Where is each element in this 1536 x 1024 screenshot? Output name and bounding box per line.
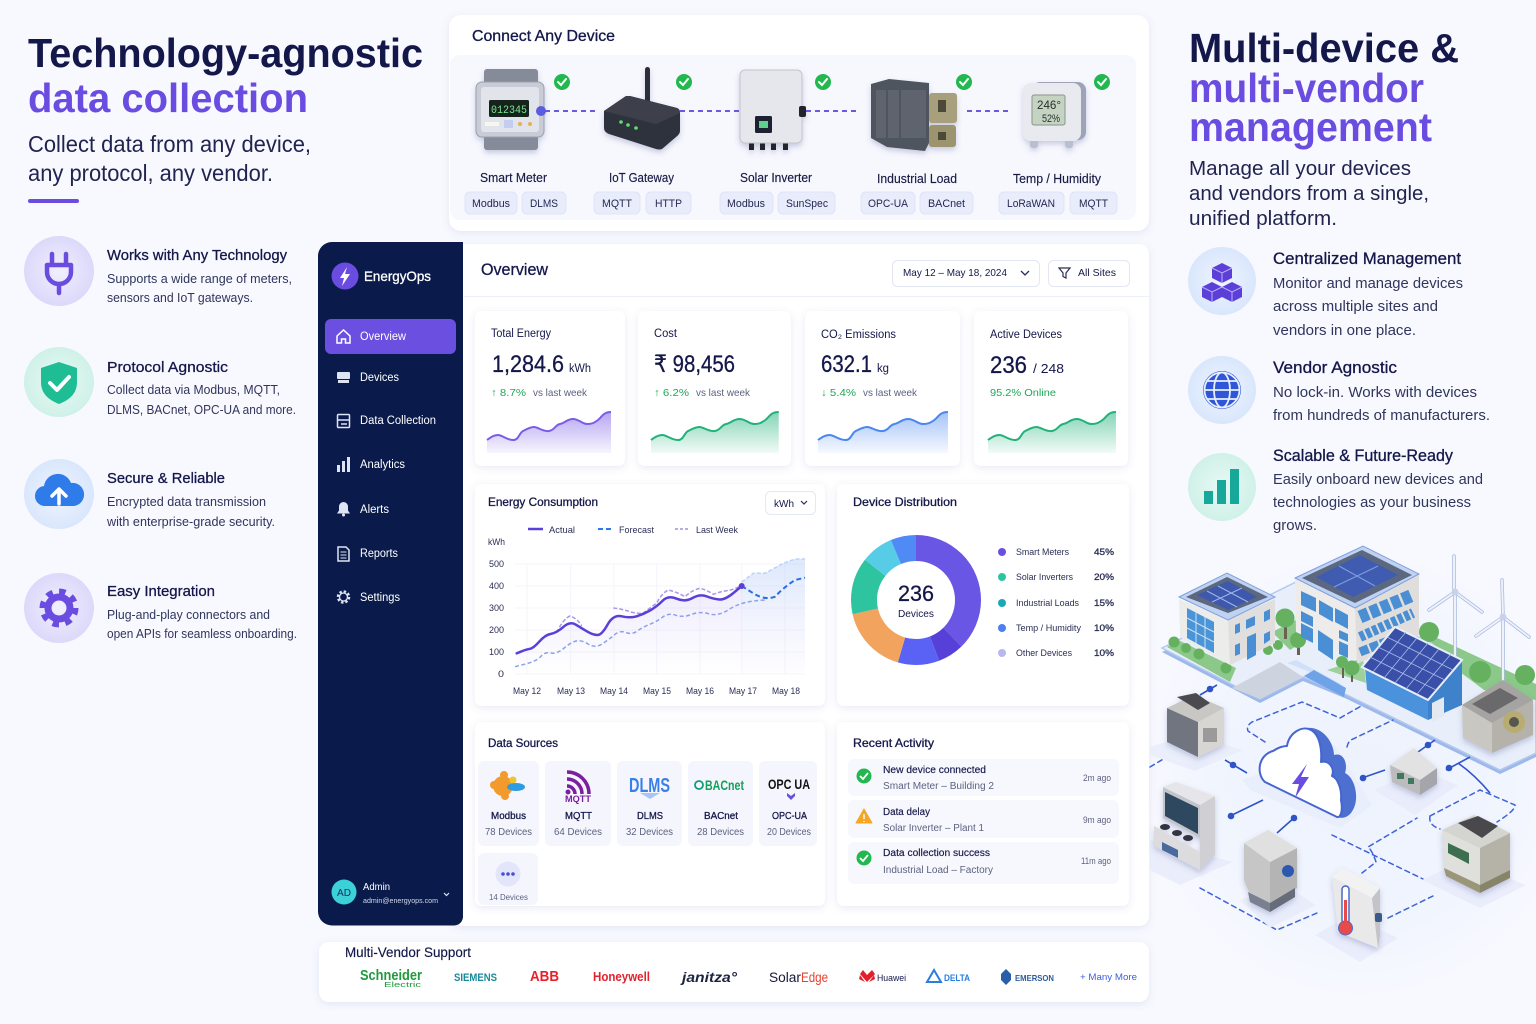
logo: schneider electric: Electric xyxy=(384,980,421,989)
device: temp and humidity sensor xyxy=(1023,82,1086,148)
donut legend: 15% xyxy=(1094,598,1114,608)
kpi: co2 emissions xyxy=(805,311,960,466)
panel: data sources: Data Sources xyxy=(488,736,558,750)
donut legend: Solar Inverters xyxy=(1016,572,1073,582)
overview header: May 12 – May 18, 2024 xyxy=(903,267,1007,279)
logo: delta xyxy=(927,970,970,984)
sparkline xyxy=(651,412,779,453)
panel: energy consumption chart: Energy Consumption xyxy=(488,495,598,509)
device: industrial load xyxy=(871,79,957,151)
tile: opc-ua: OPC UA xyxy=(768,776,810,792)
sidebar xyxy=(318,242,463,926)
legend: Actual xyxy=(549,525,575,536)
tile: dlms: 32 Devices xyxy=(626,827,673,838)
logo: solaredge: Solar xyxy=(769,970,802,985)
tile: other sources: 14 Devices xyxy=(489,892,528,902)
subtitle: Collect data from any device, xyxy=(28,131,311,157)
feature: protocol agnostic: DLMS, BACnet, OPC-UA and more. xyxy=(107,403,296,417)
nav: alerts xyxy=(337,502,389,516)
nav: devices xyxy=(337,372,399,384)
nav: overview (active): Overview xyxy=(360,331,407,343)
nav: analytics xyxy=(337,457,405,472)
nav: reports xyxy=(338,547,398,561)
donut legend: 45% xyxy=(1094,547,1114,557)
device: enclosure xyxy=(1244,830,1297,912)
protocol pills: OPC-UA xyxy=(868,198,909,210)
kpi: active devices: / 248 xyxy=(1033,361,1064,376)
feature: easy integration: open APIs for seamless onboarding. xyxy=(107,627,297,641)
axes: 300 xyxy=(489,603,504,614)
icon: cloud upload xyxy=(24,459,94,529)
kpi: active devices: 236 xyxy=(990,352,1027,379)
tile: mqtt: 64 Devices xyxy=(554,827,602,838)
feature: scalable and future-ready: Scalable & Future-Ready xyxy=(1273,447,1454,465)
protocol pills xyxy=(465,192,1117,214)
logo: delta: DELTA xyxy=(944,973,970,984)
donut center label xyxy=(898,581,934,620)
cloud hub xyxy=(1242,728,1372,828)
feature: vendor agnostic: from hundreds of manufacturers. xyxy=(1273,408,1490,424)
nav: devices: Devices xyxy=(360,372,399,384)
kpi: cost xyxy=(638,311,791,466)
unit selector xyxy=(766,492,816,514)
device: temperature sensor xyxy=(1332,868,1382,948)
tile: mqtt: MQTT xyxy=(565,794,591,805)
icon: gear xyxy=(24,573,94,643)
axes: 100 xyxy=(489,647,504,658)
tile: dlms xyxy=(617,761,682,846)
title: data collection xyxy=(28,75,308,121)
device: network cabinet xyxy=(1167,693,1224,757)
feature: scalable and future-ready: Easily onboard new devices and xyxy=(1273,472,1483,488)
donut legend xyxy=(998,547,1114,658)
logo: huawei: Huawei xyxy=(877,973,906,983)
feature: secure and reliable: with enterprise-grade security. xyxy=(106,515,275,529)
tile: opc-ua xyxy=(759,761,817,846)
feature: secure and reliable: Secure & Reliable xyxy=(107,470,225,487)
logo: siemens: SIEMENS xyxy=(454,972,497,984)
feature: works with any technology: sensors and IoT gateways. xyxy=(107,291,253,305)
feature: protocol agnostic: Protocol Agnostic xyxy=(107,359,229,376)
axes xyxy=(488,537,800,697)
panel: connect any device xyxy=(449,15,1149,231)
tile: bacnet xyxy=(688,761,753,846)
activity: data delay: Solar Inverter – Plant 1 xyxy=(883,823,984,834)
device labels: IoT Gateway xyxy=(609,171,675,185)
logo: schneider electric: Schneider xyxy=(360,968,422,984)
axes: 0 xyxy=(498,669,504,680)
feature: centralized management: Monitor and manage devices xyxy=(1273,276,1463,292)
logo: honeywell: Honeywell xyxy=(593,970,650,984)
device labels: Solar Inverter xyxy=(740,171,812,185)
unit selector: kWh xyxy=(774,498,794,510)
donut center label: Devices xyxy=(898,608,934,620)
device: compressor xyxy=(1462,680,1533,753)
activity: data delay xyxy=(848,800,1119,838)
kpi: co2 emissions: vs last week xyxy=(863,387,918,399)
feature: easy integration: Plug-and-play connectors and xyxy=(107,608,270,622)
logo xyxy=(332,262,431,290)
axes: 400 xyxy=(489,581,504,592)
wind turbines xyxy=(1429,556,1529,680)
logo: schneider electric xyxy=(360,968,422,989)
panel: multi-vendor support xyxy=(319,942,1149,1002)
user profile: Admin xyxy=(363,882,390,893)
connection lines xyxy=(545,110,1010,112)
subtitle: Manage all your devices xyxy=(1189,157,1411,180)
kpi: active devices: 95.2% Online xyxy=(990,387,1056,399)
tile: bacnet: BACnet xyxy=(705,777,744,793)
device: smart meter xyxy=(476,69,546,150)
kpi: cost: vs last week xyxy=(696,387,751,399)
donut legend: Industrial Loads xyxy=(1016,598,1079,608)
legend: Forecast xyxy=(619,525,654,536)
panel: device distribution: Device Distribution xyxy=(853,495,957,509)
sparkline xyxy=(818,412,948,453)
feature: secure and reliable xyxy=(24,459,275,529)
kpi: cost: ₹ 98,456 xyxy=(654,351,735,378)
status checks xyxy=(554,74,1110,90)
user profile: admin@energyops.com xyxy=(363,896,438,905)
panel: recent activity xyxy=(837,722,1129,906)
kpi: total energy xyxy=(475,311,625,466)
tile: dlms: DLMS xyxy=(637,810,663,822)
axes: May 14 xyxy=(600,686,628,697)
donut legend: Other Devices xyxy=(1016,648,1072,658)
axes: 200 xyxy=(489,625,504,636)
axes: kWh xyxy=(488,537,505,548)
user profile xyxy=(332,880,449,905)
tile: mqtt xyxy=(545,761,611,846)
feature: protocol agnostic xyxy=(24,347,296,417)
accent bar xyxy=(28,199,79,203)
device: iot gateway xyxy=(604,67,680,150)
kpi: active devices xyxy=(974,311,1128,466)
gridlines and plot xyxy=(515,559,805,674)
subtitle: unified platform. xyxy=(1189,207,1337,230)
logo: huawei xyxy=(859,970,906,983)
logo: janitza: janitza° xyxy=(680,969,737,985)
protocol pills: HTTP xyxy=(655,198,682,210)
tile: opc-ua: OPC-UA xyxy=(772,810,807,822)
isometric illustration: connected sites and devices xyxy=(1150,546,1536,962)
feature: scalable and future-ready: technologies as your business xyxy=(1273,495,1471,511)
feature: vendor agnostic xyxy=(1188,356,1490,424)
device labels xyxy=(480,171,1102,186)
kpi: total energy: kWh xyxy=(569,363,591,375)
axes: 500 xyxy=(489,559,504,570)
feature: scalable and future-ready: grows. xyxy=(1273,518,1317,534)
icon: cubes xyxy=(1188,247,1256,315)
device: smart meter: 012345 xyxy=(491,105,527,117)
device: temp and humidity sensor: 246° xyxy=(1037,98,1061,112)
feature: protocol agnostic: Collect data via Modbus, MQTT, xyxy=(107,383,280,397)
many more: + Many More xyxy=(1080,972,1137,983)
activity: new device connected: 2m ago xyxy=(1083,773,1111,783)
solar canopy xyxy=(1362,627,1462,722)
device: gateway node xyxy=(1390,748,1437,795)
kpi: co2 emissions: 632.1 xyxy=(821,351,872,378)
donut legend: Smart Meters xyxy=(1016,547,1069,557)
feature: works with any technology: Supports a wide range of meters, xyxy=(107,272,292,286)
nav: settings xyxy=(338,592,400,604)
axes: May 15 xyxy=(643,686,671,697)
panel: recent activity: Recent Activity xyxy=(853,736,934,750)
building: left office xyxy=(1179,573,1275,665)
tile: modbus xyxy=(478,761,539,846)
title: Multi-device & xyxy=(1189,25,1459,71)
left panel: technology-agnostic data collection xyxy=(24,30,423,643)
feature: centralized management: Centralized Management xyxy=(1273,250,1461,268)
logo: emerson xyxy=(1001,969,1054,985)
protocol pills: MQTT xyxy=(602,198,632,210)
device pads xyxy=(1150,735,1526,962)
overview header: Overview xyxy=(481,261,548,279)
tile: modbus: 78 Devices xyxy=(485,827,532,838)
feature: centralized management xyxy=(1188,247,1463,339)
icon: globe xyxy=(1188,356,1256,424)
device: solar inverter xyxy=(740,70,806,150)
feature: easy integration xyxy=(24,573,297,643)
tile: opc-ua: 20 Devices xyxy=(767,827,811,838)
sparkline xyxy=(487,412,611,453)
sparkline xyxy=(988,412,1116,453)
activity: new device connected: Smart Meter – Building 2 xyxy=(883,781,994,792)
activity: data collection success xyxy=(848,842,1119,884)
tile: mqtt: MQTT xyxy=(565,810,593,822)
donut center label: 236 xyxy=(898,581,934,606)
feature: vendor agnostic: No lock-in. Works with devices xyxy=(1273,385,1477,401)
protocol pills: Modbus xyxy=(727,198,765,210)
tile: bacnet: BACnet xyxy=(704,810,738,822)
nav: overview (active) xyxy=(325,319,456,354)
icon: shield xyxy=(24,347,94,417)
heading: Connect Any Device xyxy=(472,28,615,45)
axes: May 18 xyxy=(772,686,800,697)
title: management xyxy=(1189,104,1432,150)
feature: secure and reliable: Encrypted data transmission xyxy=(107,495,266,509)
subtitle: any protocol, any vendor. xyxy=(28,160,273,186)
panel: data sources xyxy=(475,722,825,906)
device: control terminal xyxy=(1154,782,1215,870)
subtitle: and vendors from a single, xyxy=(1189,182,1429,205)
tile: modbus: Modbus xyxy=(491,810,526,822)
tile: other sources xyxy=(478,853,538,905)
user profile: AD xyxy=(337,888,351,899)
ground platform xyxy=(1162,582,1536,774)
tile: bacnet: 28 Devices xyxy=(697,827,744,838)
trees xyxy=(1168,608,1535,685)
feature: works with any technology: Works with Any Technology xyxy=(107,247,287,264)
axes: May 16 xyxy=(686,686,714,697)
legend xyxy=(528,525,738,536)
axes: May 17 xyxy=(729,686,757,697)
donut legend: Temp / Humidity xyxy=(1016,623,1081,633)
lawn trees front xyxy=(1336,656,1360,682)
logo: EnergyOps xyxy=(364,268,431,284)
device labels: Smart Meter xyxy=(480,171,547,185)
axes: May 13 xyxy=(557,686,585,697)
protocol pills: BACnet xyxy=(928,198,965,210)
connection paths xyxy=(1150,702,1515,930)
activity: new device connected: New device connected xyxy=(883,765,986,776)
panel: energy consumption chart xyxy=(475,484,825,706)
title: multi-vendor xyxy=(1189,65,1424,111)
nav: analytics: Analytics xyxy=(360,459,405,471)
donut legend: 10% xyxy=(1094,623,1114,633)
overview header xyxy=(481,260,1130,286)
overview header: All Sites xyxy=(1078,267,1116,279)
panel: multi-vendor support: Multi-Vendor Support xyxy=(345,945,471,960)
protocol pills: DLMS xyxy=(530,198,558,210)
protocol pills: MQTT xyxy=(1079,198,1108,210)
title xyxy=(1189,25,1459,150)
feature: easy integration: Easy Integration xyxy=(107,583,215,600)
logo: solaredge xyxy=(769,970,828,985)
legend: Last Week xyxy=(696,525,738,536)
activity: data delay: Data delay xyxy=(883,807,930,818)
activity: data collection success: Data collection success xyxy=(883,848,990,859)
building: main office xyxy=(1295,546,1419,664)
kpi: total energy: ↑ 8.7% xyxy=(491,387,526,399)
kpi: total energy: 1,284.6 xyxy=(492,351,564,378)
logo: emerson: EMERSON xyxy=(1015,973,1054,983)
feature: centralized management: vendors in one place. xyxy=(1273,323,1416,339)
panel: device distribution xyxy=(837,484,1129,706)
tile: dlms: DLMS xyxy=(629,775,670,797)
device links xyxy=(1200,685,1490,833)
activity: new device connected xyxy=(848,759,1119,796)
subtitle xyxy=(28,131,311,186)
axes: May 12 xyxy=(513,686,541,697)
title: Technology-agnostic xyxy=(28,30,423,76)
donut legend: 20% xyxy=(1094,572,1114,582)
device: temp and humidity sensor: 52% xyxy=(1042,113,1060,125)
donut chart xyxy=(864,548,968,652)
icon: plug xyxy=(24,236,94,306)
nav: data collection xyxy=(338,414,436,428)
nav: alerts: Alerts xyxy=(360,504,389,516)
donut legend: 10% xyxy=(1094,648,1114,658)
subtitle xyxy=(1189,157,1429,230)
activity: data delay: 9m ago xyxy=(1083,815,1111,825)
feature: works with any technology xyxy=(24,236,292,306)
protocol pills: LoRaWAN xyxy=(1007,198,1055,210)
feature: scalable and future-ready xyxy=(1188,447,1483,534)
logo: abb: ABB xyxy=(530,969,559,985)
kpi: co2 emissions: ↓ 5.4% xyxy=(821,387,856,399)
feature: vendor agnostic: Vendor Agnostic xyxy=(1273,359,1397,377)
logo: solaredge: Edge xyxy=(801,970,828,985)
kpi: total energy: vs last week xyxy=(533,387,588,399)
feature: centralized management: across multiple sites and xyxy=(1273,299,1438,315)
title xyxy=(28,30,423,121)
kpi: co2 emissions: kg xyxy=(877,363,889,375)
kpi: total energy: Total Energy xyxy=(491,328,551,340)
kpi: cost: Cost xyxy=(654,328,678,340)
protocol pills: SunSpec xyxy=(786,198,828,210)
device: smart meter unit xyxy=(1442,815,1510,893)
nav: data collection: Data Collection xyxy=(360,415,436,427)
kpi: active devices: Active Devices xyxy=(990,329,1062,341)
device labels: Temp / Humidity xyxy=(1013,172,1102,186)
kpi: co2 emissions: CO₂ Emissions xyxy=(821,329,896,341)
kpi: cost: ↑ 6.2% xyxy=(654,387,689,399)
protocol pills: Modbus xyxy=(472,198,510,210)
icon: bar chart xyxy=(1188,453,1256,521)
nav: reports: Reports xyxy=(360,548,398,560)
nav: settings: Settings xyxy=(360,592,400,604)
panel: dashboard xyxy=(318,242,1149,926)
activity: data collection success: 11m ago xyxy=(1081,856,1111,866)
right panel: multi-device management xyxy=(1188,25,1490,534)
device labels: Industrial Load xyxy=(877,172,957,186)
activity: data collection success: Industrial Load – Factory xyxy=(883,865,993,876)
